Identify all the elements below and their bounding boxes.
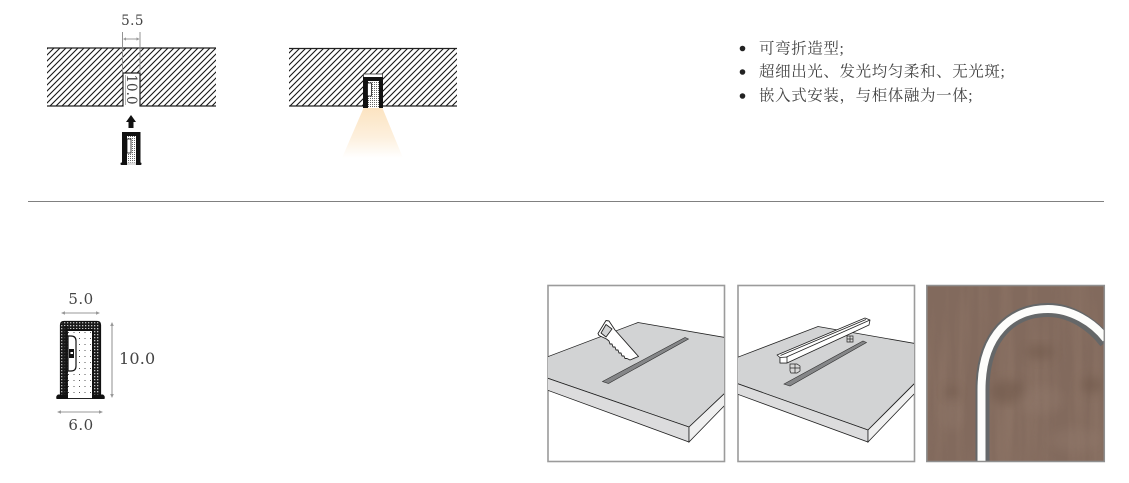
board: [737, 326, 915, 442]
light cone: [342, 107, 403, 158]
board: [547, 322, 725, 442]
icon: installed profile: [363, 74, 383, 108]
dimension: 10.0: [110, 322, 155, 398]
dimension: slot width 5.5: 5.5: [121, 13, 144, 29]
arrow: insert upward: [126, 115, 136, 128]
icon: clip right: [847, 336, 853, 342]
icon: profile below slot: [120, 132, 142, 165]
bullet item 3: 嵌入式安装，与柜体融为一体;: [759, 86, 973, 104]
hatched panel with slot: [47, 48, 216, 107]
panel: installing profile into slot: [737, 286, 915, 462]
slot: [602, 338, 688, 384]
bullet item 1: 可弯折造型;: [759, 40, 844, 58]
dimension: 5.0: 5.0: [68, 290, 94, 308]
icon: clip left: [790, 364, 800, 373]
feature list: [740, 40, 1005, 104]
hatched panel: [289, 48, 457, 106]
profile cross-section: [56, 322, 105, 399]
slot: [784, 341, 866, 386]
dimension: 10.0: 10.0: [119, 349, 155, 368]
light strip: [982, 309, 1106, 464]
dimension: 5.0: [61, 290, 100, 315]
dimension: 6.0: 6.0: [68, 416, 94, 434]
light strip groove: [982, 310, 1106, 464]
wood texture: [926, 285, 1105, 462]
divider: [28, 201, 1104, 202]
dimension: slot depth 10.0: 10.0: [123, 74, 139, 105]
bullet item 2: 超细出光、发光均匀柔和、无光斑;: [759, 62, 1005, 80]
dimension: 6.0: [57, 410, 103, 434]
panel: finished result on wood: [926, 285, 1106, 464]
panel: sawing the slot: [547, 286, 725, 462]
profile bar: [777, 318, 870, 363]
diagram: profile installed with light output: [289, 48, 457, 158]
icon: saw: [598, 320, 638, 360]
diagram: profile cross-section with dimensions: [56, 290, 155, 434]
dimension: slot width 5.5: [121, 13, 144, 73]
diagram: cut slot with profile insertion: [47, 13, 216, 165]
